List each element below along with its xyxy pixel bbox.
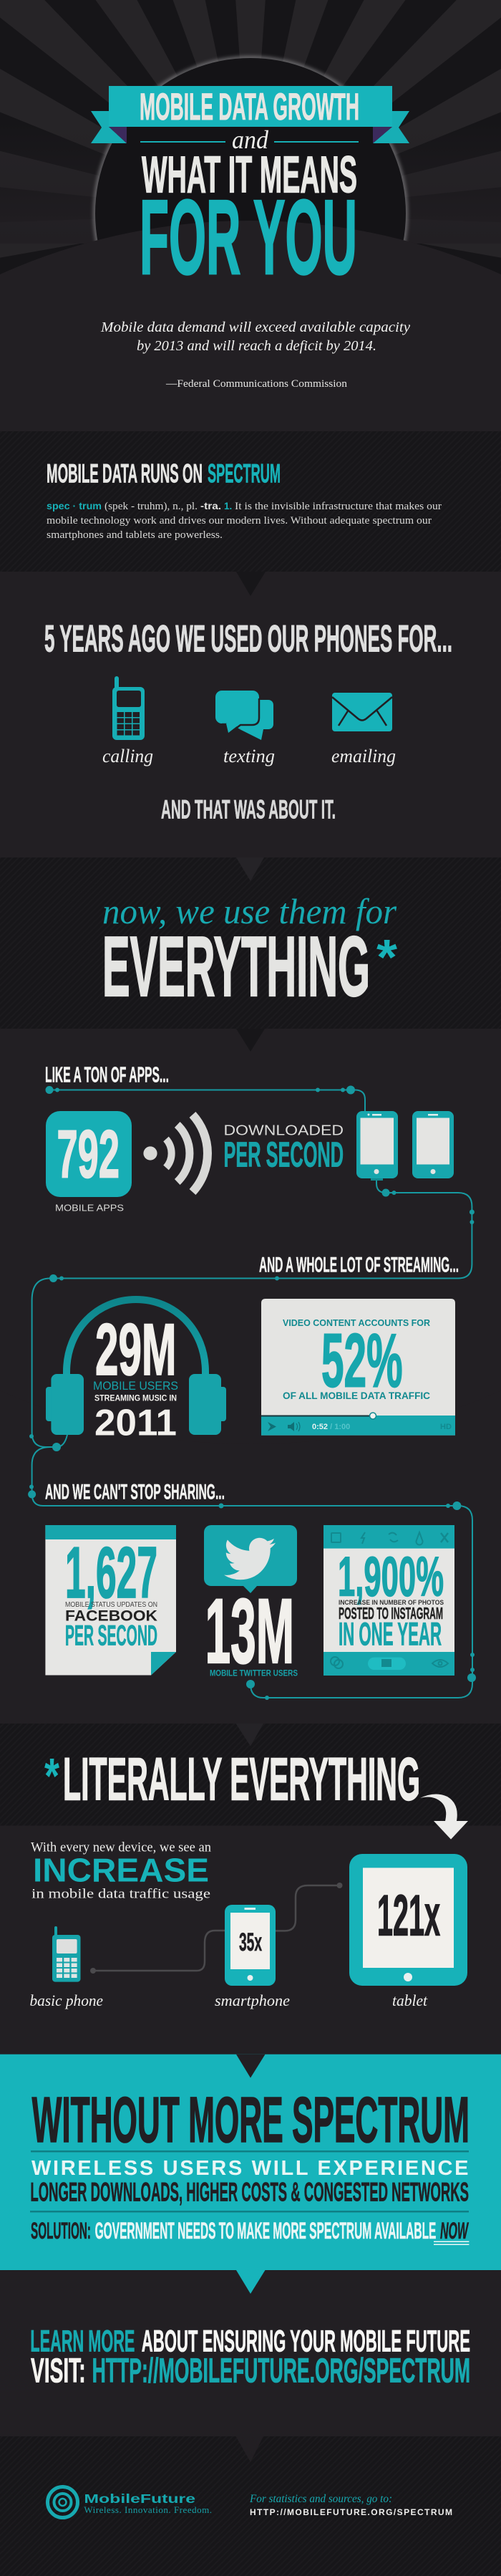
panel: now we use them for everything [0,857,501,1052]
apps section [45,1062,454,1213]
title connector and: and [232,125,269,154]
FCC quote [100,319,410,354]
panel: video player [261,1299,455,1436]
sunburst rays [0,0,501,413]
traffic usage text: in mobile data traffic usage [31,1887,210,1901]
logo wordmark: MobileFuture [84,2491,195,2506]
panel: twitter [204,1525,298,1683]
app icon tile: 792 [57,1116,120,1192]
definition text [47,500,442,541]
growth connector lines [93,1885,339,1971]
icon: wifi signal [143,1115,208,1192]
twitter bubble [204,1525,297,1593]
learn more line [30,2324,470,2358]
logo tagline: Wireless. Innovation. Freedom. [84,2504,212,2515]
visit line: VISIT: [31,2352,86,2390]
connector nodes [28,1086,476,1700]
definition text: smartphones and tablets are powerless. [47,529,223,541]
closing line: AND THAT WAS ABOUT IT. [161,795,336,824]
smartphone label: smartphone [215,1991,290,2009]
panel: facebook note [45,1525,176,1675]
panel: footer [0,2436,501,2576]
panel: video player: VIDEO CONTENT ACCOUNTS FOR [283,1317,431,1328]
learn more line: LEARN MORE [30,2324,135,2358]
connector path [32,1090,472,1698]
tablet label: tablet [392,1991,428,2009]
icon: tablet 121x [349,1854,467,1986]
icon: basic phone calling [112,676,145,740]
definition text: (spek - truhm), n., pl. [104,501,198,512]
asterisk: * [376,929,398,985]
label emailing: emailing [331,746,396,766]
29M stat: 29M [95,1309,176,1390]
icon: basic phone [52,1926,80,1982]
panel: video player: HD [440,1423,452,1431]
panel: twitter: 13M [205,1580,294,1683]
FCC quote: Mobile data demand will exceed available capacity [100,319,410,335]
label texting: texting [223,746,275,766]
sources note: For statistics and sources, go to: [249,2493,392,2505]
horizon hill [0,221,501,1444]
ribbon banner [91,86,409,143]
icon: chat bubbles texting [215,691,273,740]
panel: facebook note: PER SECOND [65,1620,157,1652]
ray fade [0,122,501,244]
icon: headphones [46,1299,226,1435]
solution line: NOW [440,2218,469,2244]
icon: smartphone two [412,1111,454,1178]
FCC quote: by 2013 and will reach a deficit by 2014. [137,338,376,354]
panel: facebook note: MOBILE STATUS UPDATES ON [65,1600,157,1609]
connector nodes [90,1883,342,1974]
definition text: It is the invisible infrastructure that makes our [235,501,442,512]
panel: video player: 0:52 / 1:00 [312,1423,350,1431]
dark sun circle [95,58,406,369]
panel: spectrum definition [0,431,501,596]
panel: device comparison [30,1840,467,2009]
definition text: mobile technology work and drives our modern lives. Without adequate spectrum our [47,515,432,527]
streaming music label: STREAMING MUSIC IN [94,1394,177,1403]
mobile users label: MOBILE USERS [93,1380,178,1393]
panel: facebook note: FACEBOOK [65,1607,157,1625]
per second label: PER SECOND [223,1136,344,1175]
sources url: HTTP://MOBILEFUTURE.ORG/SPECTRUM [250,2507,452,2517]
panel: five years ago [44,617,452,824]
sharing section [45,1480,454,1683]
app icon tile [46,1111,132,1197]
mobile apps label: MOBILE APPS [55,1202,124,1213]
sharing heading: AND WE CAN'T STOP SHARING... [45,1480,225,1504]
definition text: -tra. [200,501,221,511]
downloaded label: DOWNLOADED [223,1123,344,1139]
icon: smartphone one [356,1111,398,1181]
panel: video player: 52% [321,1318,402,1403]
definition text: spec · trum [47,500,102,511]
wireless users line: WIRELESS USERS WILL EXPERIENCE [31,2157,468,2180]
spectrum heading: MOBILE DATA RUNS ON [47,458,203,489]
teal script heading: now, we use them for [102,891,397,931]
2011 stat: 2011 [94,1403,177,1444]
panel: video player: OF ALL MOBILE DATA TRAFFIC [283,1390,430,1401]
arrow: curved down [420,1794,468,1840]
icon: smartphone 35x: 35x [239,1928,262,1956]
panel: spectrum definition: SPECTRUM [208,458,281,489]
panel: learn more [30,2324,470,2390]
panel: facebook note: 1,627 [65,1533,157,1613]
solution line: SOLUTION: [31,2218,91,2244]
quote attribution: —Federal Communications Commission [165,378,348,390]
icon: envelope emailing [332,693,392,731]
basic phone label: basic phone [30,1991,103,2009]
mobile twitter users label: MOBILE TWITTER USERS [210,1670,298,1678]
logo rings [47,2487,77,2517]
header panel [0,0,501,1444]
panel: literally everything [0,1724,501,1840]
increase intro: With every new device, we see an [31,1840,211,1855]
panel: instagram: INCREASE IN NUMBER OF PHOTOS [339,1599,444,1607]
apps heading: LIKE A TON OF APPS... [45,1062,169,1087]
definition text: 1. [224,501,232,511]
panel: instagram [324,1525,454,1676]
label calling: calling [102,746,153,766]
streaming section [46,1254,459,1444]
increase word: INCREASE [33,1851,209,1888]
icon: smartphone 35x [225,1905,276,1986]
panel: without more spectrum [0,2054,501,2294]
asterisk: * [44,1748,60,1804]
